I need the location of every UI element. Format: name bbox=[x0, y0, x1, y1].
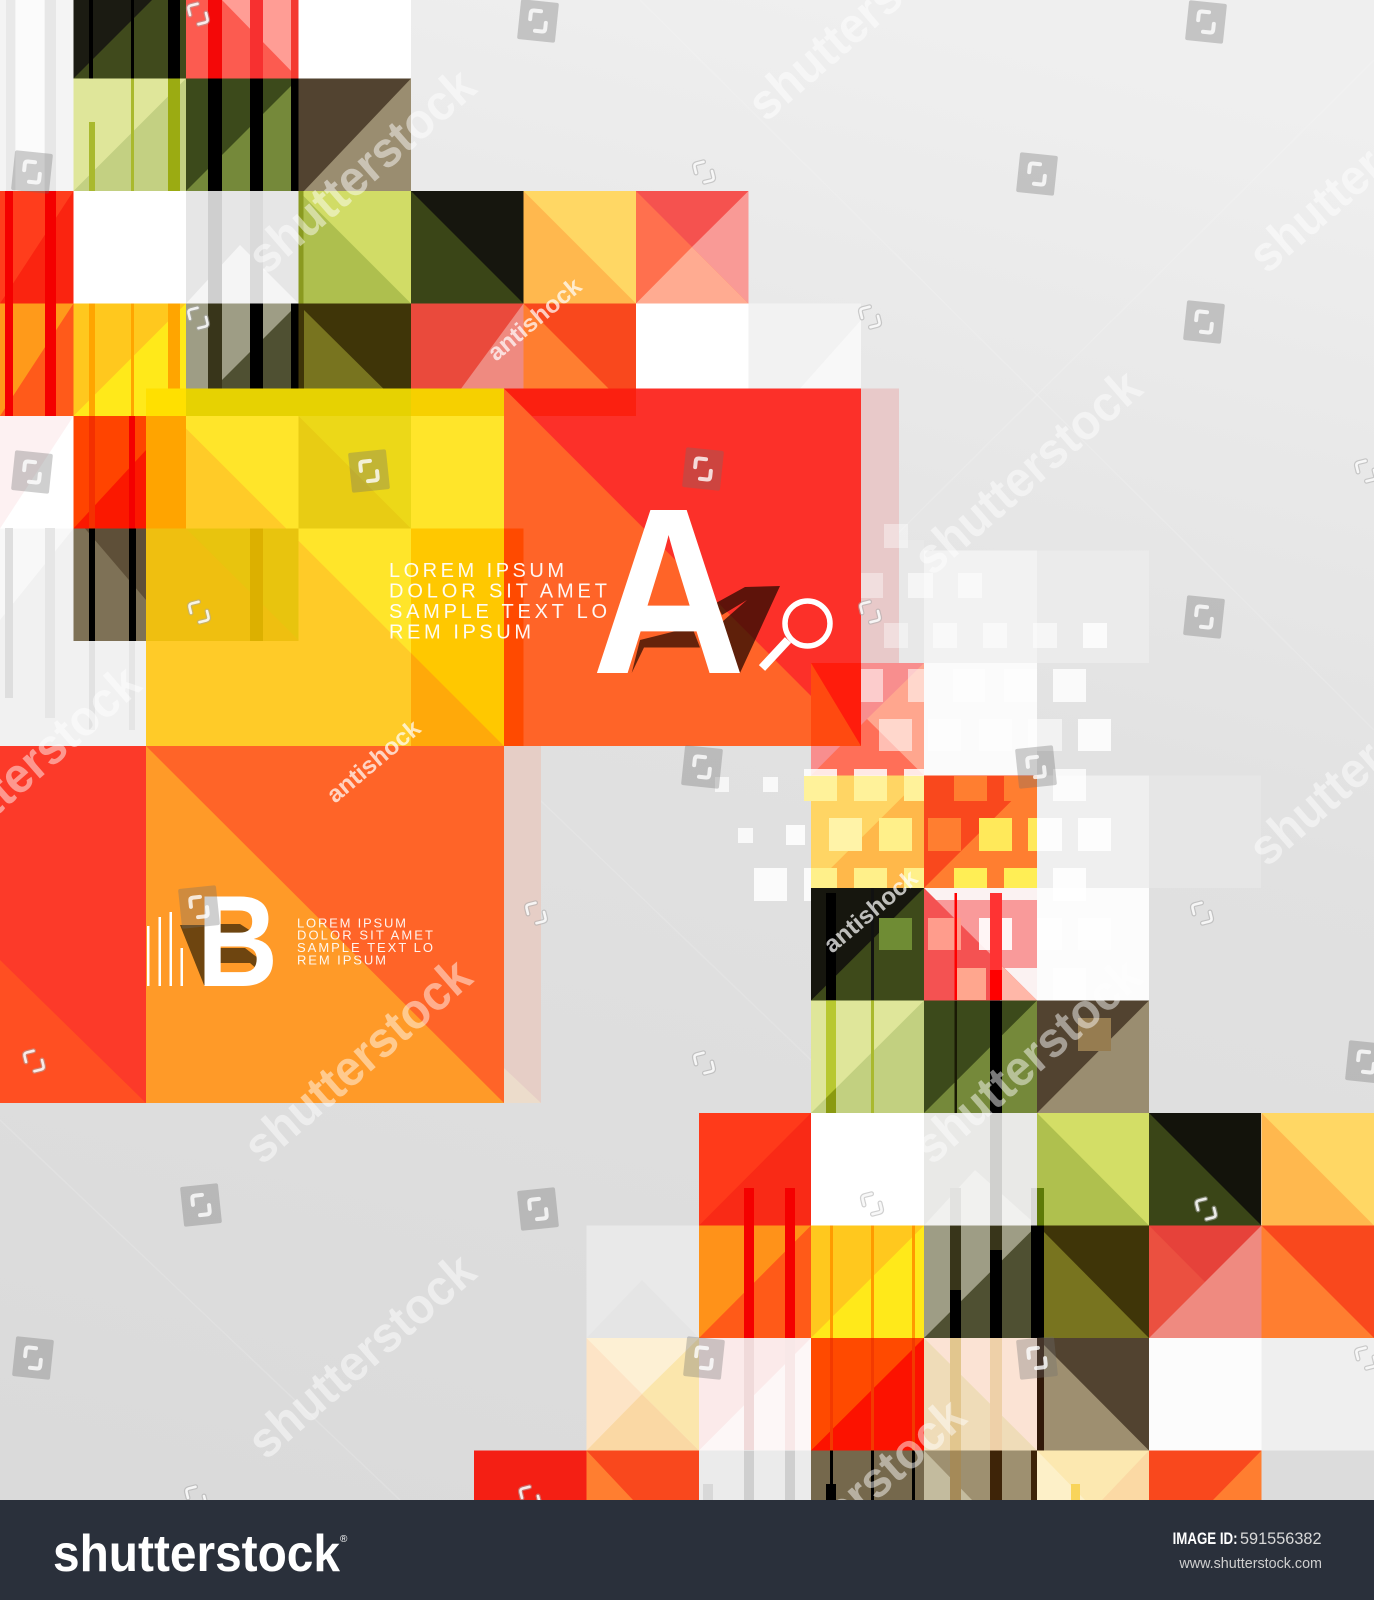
image id label: IMAGE ID: bbox=[1173, 1530, 1238, 1548]
icon: magnifying glass bbox=[762, 601, 830, 668]
lorem ipsum text bbox=[389, 560, 607, 644]
watermark: antishock text: antishock bbox=[819, 864, 924, 959]
lorem ipsum text: LOREM IPSUM bbox=[389, 560, 564, 582]
watermark: antishock text: antishock bbox=[322, 714, 427, 809]
footer logo: shutterstock bbox=[53, 1525, 340, 1583]
red stripes over squares bbox=[954, 893, 1002, 1000]
orange-red square bbox=[411, 388, 899, 754]
registered mark: ® bbox=[340, 1534, 348, 1545]
watermark: shutterstock text: shutterstock bbox=[236, 57, 486, 284]
lorem ipsum text: REM IPSUM bbox=[389, 622, 531, 644]
lorem ipsum text: REM IPSUM bbox=[297, 953, 386, 968]
watermark: antishock text bbox=[322, 272, 924, 959]
panel: left edge column bbox=[0, 0, 146, 746]
watermark: shutterstock text: shutterstock bbox=[232, 947, 482, 1174]
lorem ipsum text: SAMPLE TEXT LO bbox=[389, 601, 607, 623]
panel: middle right mosaic bbox=[811, 540, 1261, 1113]
pixel squares bbox=[715, 524, 1111, 1051]
footer website: www.shutterstock.com bbox=[1178, 1555, 1322, 1572]
watermark: shutterstock text: shutterstock bbox=[902, 358, 1152, 585]
lorem ipsum text: LOREM IPSUM bbox=[297, 915, 406, 930]
lorem ipsum text: SAMPLE TEXT LO bbox=[297, 940, 433, 955]
letter B with shadow: B bbox=[197, 868, 278, 1014]
letter A with shadow: A bbox=[592, 459, 746, 724]
image id number: 591556382 bbox=[1240, 1530, 1322, 1548]
watermark: shutterstock text: shutterstock bbox=[902, 947, 1152, 1174]
panel: bottom mosaic bbox=[474, 1113, 1374, 1500]
lorem ipsum text bbox=[297, 915, 433, 968]
yellow square bbox=[146, 388, 504, 746]
icon: vertical bars bbox=[147, 912, 183, 986]
panel: top mosaic bbox=[0, 0, 861, 641]
panel: A card bbox=[146, 388, 899, 754]
watermark: antishock text: antishock bbox=[483, 272, 588, 367]
footer bar bbox=[0, 1500, 1374, 1600]
lorem ipsum text: DOLOR SIT AMET bbox=[389, 580, 607, 602]
lorem ipsum text: DOLOR SIT AMET bbox=[297, 928, 433, 943]
panel: B card bbox=[0, 746, 541, 1103]
watermark: shutterstock text: shutterstock bbox=[236, 1242, 486, 1469]
